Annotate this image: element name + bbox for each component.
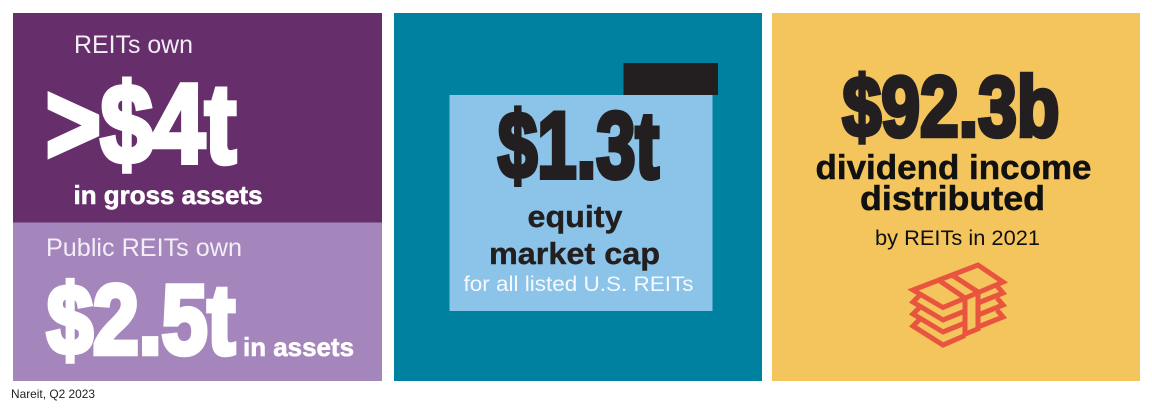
big number: $92.3b: $92.3b [842, 60, 1060, 155]
label: equity: equity [528, 199, 623, 234]
label: REITs own: REITs own [74, 31, 193, 59]
label: Public REITs own: Public REITs own [46, 234, 242, 262]
light blue card [450, 95, 712, 311]
icon: stack of money [913, 265, 1003, 345]
label: by REITs in 2021: by REITs in 2021 [875, 227, 1040, 250]
panel: Public REITs own assets [13, 222, 382, 381]
label: distributed: distributed [860, 180, 1045, 218]
panel: REITs own gross assets [13, 13, 382, 222]
big number: $1.3t: $1.3t [498, 92, 659, 198]
label: market cap: market cap [489, 236, 660, 271]
black tab [624, 63, 718, 95]
label: dividend income: dividend income [816, 149, 1092, 187]
label: in assets: in assets [243, 332, 354, 362]
panel: dividend income [772, 13, 1140, 381]
label: for all listed U.S. REITs: for all listed U.S. REITs [464, 273, 694, 296]
panel: equity market cap [394, 13, 762, 381]
big number: >$4t: >$4t [46, 62, 236, 186]
source note: Nareit, Q2 2023 [11, 387, 95, 401]
label: in gross assets: in gross assets [74, 180, 262, 210]
big number: $2.5t: $2.5t [47, 264, 235, 374]
